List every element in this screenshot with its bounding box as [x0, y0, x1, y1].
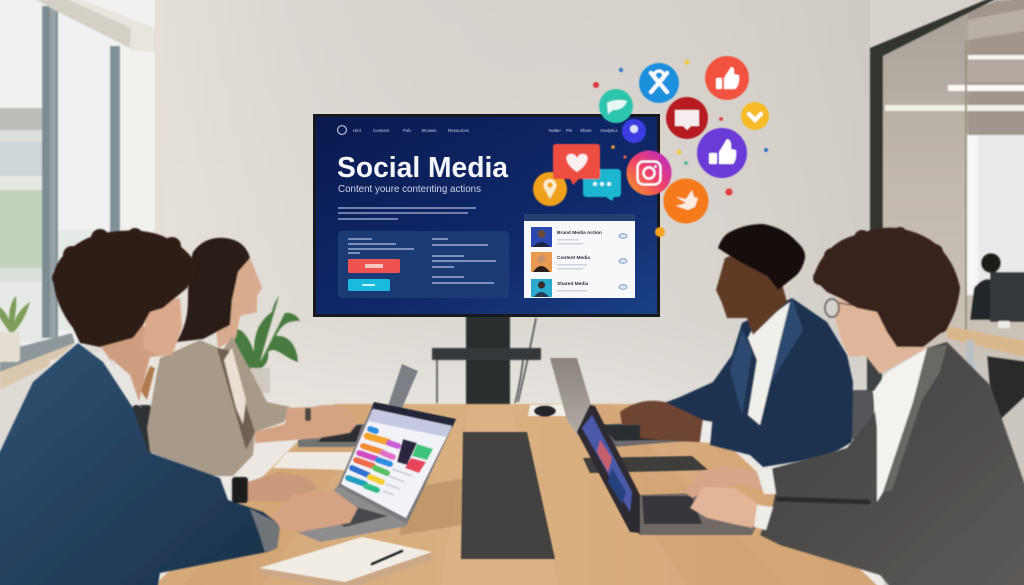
person jacket: [0, 343, 280, 585]
person watch: [232, 477, 248, 503]
wall display: [313, 114, 660, 317]
man neck and face: [716, 252, 787, 335]
icon: instagram: [626, 150, 672, 196]
rear right laptop: [550, 358, 700, 447]
notebook: [259, 537, 432, 585]
person face: [143, 298, 182, 355]
potted plant behind woman: [234, 296, 300, 393]
center dark mat: [461, 432, 555, 559]
person hair: [813, 227, 960, 347]
person hands: [685, 465, 765, 498]
icon: yellow location pin: [533, 172, 567, 206]
man shirt: [748, 302, 790, 425]
person neck: [100, 325, 170, 405]
display nav bar: Share: [580, 128, 592, 133]
icon: orange hand: [664, 178, 708, 224]
chair behind woman: [132, 405, 152, 455]
screen stand: [432, 314, 541, 406]
background worker: [970, 253, 1001, 320]
icon: decorative dots: [593, 59, 768, 237]
cyan button: [348, 279, 390, 291]
display nav bar: Hint: [353, 128, 362, 133]
mouse and papers: [528, 404, 572, 416]
icon: yellow badge: [741, 102, 769, 130]
woman forearm and hand: [255, 405, 357, 443]
person cuffs: [754, 468, 776, 530]
laptop screen UI: [348, 429, 398, 490]
person jacket: [760, 342, 1024, 585]
background desk: [947, 326, 1024, 358]
icon: red thumbs up: [705, 56, 749, 100]
man in navy suit: [620, 224, 853, 467]
chair behind right man: [850, 355, 882, 440]
person hair: [52, 228, 197, 347]
laptop lid: [338, 402, 456, 524]
profile 3: Shared Media: [557, 281, 589, 287]
profile 1: Brand Media Action: [557, 230, 602, 236]
profile 2: Content Media: [557, 255, 590, 261]
display description lines: [338, 207, 476, 220]
icon: teal chat bubble: [583, 169, 621, 201]
display nav bar: Connect: [373, 128, 390, 133]
person shirt: [873, 348, 927, 502]
woman neck and face: [215, 258, 262, 348]
display nav bar: Pub: [403, 128, 411, 133]
woman in beige blazer: [140, 238, 357, 476]
man jacket: [640, 298, 853, 467]
icon: blue small circle: [622, 119, 646, 143]
display title: Social Media: [337, 152, 509, 184]
conference table: [150, 404, 882, 585]
background monitor: [990, 272, 1024, 322]
display nav bar: [338, 126, 618, 134]
display nav bar: Analytics: [600, 128, 618, 133]
laptop base: [297, 483, 408, 542]
person front right: [685, 227, 1024, 585]
window plant: [0, 296, 30, 362]
display subtitle: Content youre contenting actions: [338, 183, 481, 195]
floating social icons: [533, 56, 769, 237]
laptop base: [630, 493, 756, 535]
display nav bar: Twitter: [548, 128, 561, 133]
person hands: [248, 472, 318, 502]
woman hair: [176, 238, 250, 342]
display nav bar: Browse: [422, 128, 437, 133]
woman blazer: [147, 336, 290, 476]
display content panel: [338, 231, 509, 298]
person front left: [0, 228, 358, 585]
right glass office: [870, 0, 1024, 585]
icon: blue circle: [639, 63, 679, 103]
display profile card: [524, 214, 635, 298]
icon: teal chat: [599, 89, 633, 123]
display nav bar: Resources: [448, 128, 470, 133]
icon: purple thumbs up: [697, 128, 747, 178]
man cuff: [700, 420, 712, 443]
man hair: [718, 224, 805, 290]
icon: dark red speech bubble: [666, 97, 708, 139]
man hands: [620, 401, 703, 442]
icon: red heart bubble: [553, 144, 600, 185]
person glasses: [825, 299, 858, 317]
paper sheet: [273, 452, 353, 470]
red button: [348, 259, 400, 273]
display nav bar: Pin: [566, 128, 573, 133]
rear left laptop: [298, 364, 418, 447]
woman top: [224, 348, 246, 424]
left window: [0, 0, 160, 470]
front right laptop: [577, 405, 756, 535]
laptop lid: [577, 405, 640, 533]
person neck and face: [835, 298, 927, 374]
right side mat: [583, 456, 708, 473]
person cuff: [250, 509, 280, 552]
main left laptop: [297, 402, 456, 542]
